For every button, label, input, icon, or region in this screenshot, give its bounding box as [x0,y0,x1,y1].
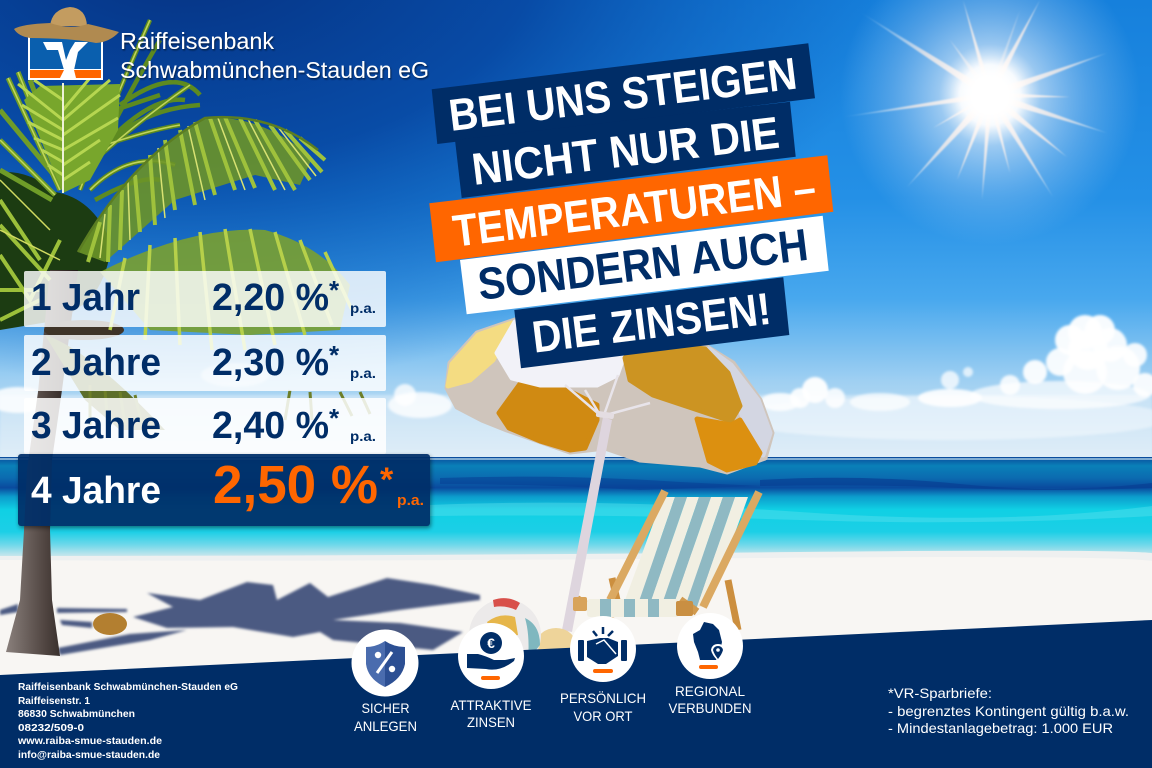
rate row 2 Jahre: 2,30 % [212,342,329,384]
footnote [888,685,1129,736]
feature: attraktive zinsen [450,623,532,730]
rate row 1 Jahr: 2,20 % [212,277,329,319]
beach ball and sand mound [469,598,576,671]
frond: right arching [78,117,325,262]
deck chair [573,491,759,630]
sun with rays [840,0,1140,245]
frond: hanging low [45,335,370,430]
rate row 3 Jahre: p.a. [350,428,376,444]
address block: 08232/509-0 [18,722,84,734]
palm crown dark mass [0,172,110,330]
headline [429,43,833,368]
icon: germany map with pin [693,622,725,669]
beach umbrella [447,320,772,632]
feature: persoenlich vor ort [560,616,646,724]
rate row 3 Jahre: 3 Jahre [31,405,161,447]
bank name: Raiffeisenbank [120,28,274,54]
headline bar 2: NICHT NUR DIE [469,107,782,195]
headline bar 3 orange: TEMPERATUREN – [450,162,818,257]
rate row 2 Jahre: * [329,340,340,370]
sea [0,457,1152,567]
rate row 1 Jahr: p.a. [350,300,376,316]
frond: lower right [100,229,352,350]
trunk crown base [44,320,124,340]
chair front legs [577,599,697,625]
feature: persoenlich vor ort: VOR ORT [574,708,633,724]
address block: Raiffeisenbank Schwabmünchen-Stauden eG [18,681,238,693]
feature: sicher anlegen [352,630,418,734]
footer band [0,620,1152,768]
rate row 1 Jahr: * [329,275,340,305]
frond: upper right spikes [80,20,200,200]
chair frame [610,491,759,607]
icon: hand with euro coin: € [487,635,495,651]
clouds right [730,315,1152,440]
chair rear legs [612,578,738,630]
frond: upper left [0,72,60,200]
frond: left [0,180,60,320]
horizon haze [0,395,1152,457]
coconut [93,613,127,635]
footnote: - Mindestanlagebetrag: 1.000 EUR [888,720,1113,736]
rate row 2 Jahre [24,335,386,391]
feature: sicher anlegen: SICHER [362,700,410,716]
rate row 3 Jahre [24,398,386,454]
chair canvas stripes [625,497,748,607]
palm trunk [6,270,78,656]
palm shadow on sand [0,578,480,655]
frond: central [18,78,120,193]
rate row 1 Jahr [24,271,386,327]
rate row 3 Jahre: 2,40 % [212,405,329,447]
feature: attraktive zinsen: ZINSEN [467,714,515,730]
headline bar 5: DIE ZINSEN! [529,283,774,363]
bank logo with straw hat [14,7,119,80]
address block: info@raiba-smue-stauden.de [18,749,160,761]
umbrella pole [562,417,612,632]
rate row 4 Jahre highlighted: p.a. [397,492,424,509]
icon: handshake [578,627,627,673]
logo square [28,29,103,80]
address block: Raiffeisenstr. 1 [18,695,90,707]
feature: persoenlich vor ort: PERSÖNLICH [560,689,646,706]
rate row 4 Jahre highlighted: 2,50 % [213,455,378,515]
bank name [120,28,429,83]
feature: attraktive zinsen: ATTRAKTIVE [450,697,532,713]
chair seat bar [573,597,693,617]
feature: regional verbunden [668,613,752,716]
footnote: *VR-Sparbriefe: [888,685,992,701]
footnote: - begrenztes Kontingent gültig b.a.w. [888,703,1129,719]
rate row 4 Jahre highlighted: 4 Jahre [31,470,161,512]
rate row 4 Jahre highlighted [18,454,430,526]
icon: shield percent [366,641,405,687]
rate row 2 Jahre: p.a. [350,365,376,381]
address block: www.raiba-smue-stauden.de [17,735,162,747]
rate row 2 Jahre: 2 Jahre [31,342,161,384]
headline bar 4 white: SONDERN AUCH [475,219,811,310]
feature: regional verbunden: VERBUNDEN [668,700,752,716]
straw hat [14,7,119,43]
rate row 4 Jahre highlighted: * [380,461,394,499]
address block: 86830 Schwabmünchen [18,708,135,720]
rate row 1 Jahr: 1 Jahr [31,277,140,319]
sky background [0,0,1152,460]
headline bar 1: BEI UNS STEIGEN [446,48,800,141]
sand beach [0,551,1152,680]
bank name: Schwabmünchen-Stauden eG [120,57,429,83]
rate row 3 Jahre: * [329,403,340,433]
canopy [447,320,772,472]
palm tree [0,20,370,656]
address block [17,681,238,761]
clouds left [0,363,452,418]
feature: sicher anlegen: ANLEGEN [354,718,417,734]
feature: regional verbunden: REGIONAL [675,683,745,699]
rate table [18,271,430,526]
